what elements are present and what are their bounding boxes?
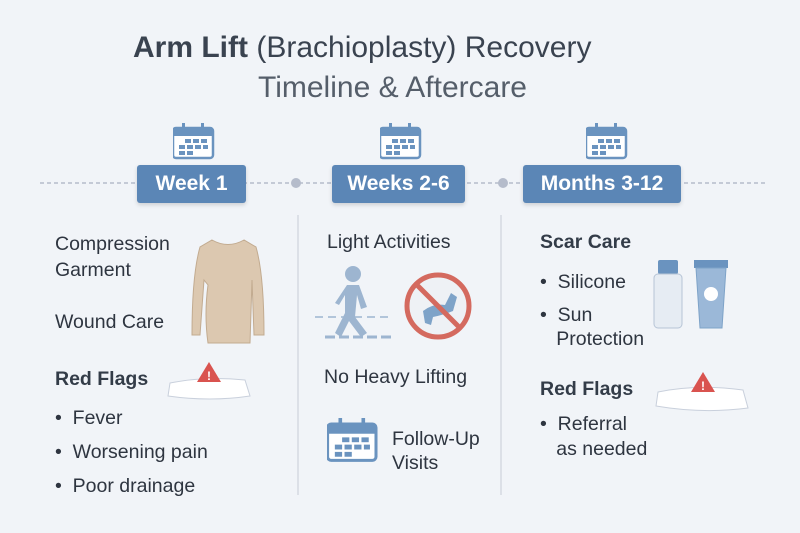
panel: months 3-12	[540, 231, 748, 460]
text: Timeline & Aftercare	[258, 71, 527, 104]
text: compression garment: Compression	[55, 233, 170, 255]
icon: silicone and sunscreen	[654, 260, 728, 328]
icon: gauze warning: !	[207, 369, 211, 383]
badge: weeks 2-6	[332, 165, 465, 203]
badge: months 3-12: Months 3-12	[541, 172, 663, 195]
list: sun protection: Protection	[556, 328, 644, 350]
panel: weeks 2-6	[315, 231, 480, 474]
heading: scar care: Scar Care	[540, 231, 631, 253]
list: scar care: • Silicone	[540, 271, 626, 293]
text: light activities: Light Activities	[327, 231, 451, 253]
list: red flags: • Poor drainage	[55, 475, 195, 497]
heading: red flags: Red Flags	[55, 368, 148, 390]
badge: weeks 2-6: Weeks 2-6	[347, 172, 450, 195]
text: follow-up visits: Follow-Up	[392, 428, 480, 450]
text: compression garment: Garment	[55, 259, 131, 281]
list: sun protection: • Sun	[540, 304, 592, 326]
text: wound care: Wound Care	[55, 311, 164, 333]
icon: walking	[315, 266, 391, 338]
text: follow-up visits	[392, 428, 480, 474]
icon: calendar months	[586, 123, 628, 160]
list: referral: as needed	[556, 438, 647, 460]
badge: week 1	[137, 165, 246, 203]
list: red flags: • Fever	[55, 407, 123, 429]
list: red flags	[55, 407, 208, 497]
icon: gauze warning: !	[701, 379, 705, 393]
title	[133, 31, 592, 104]
icon: gauze warning	[656, 372, 748, 412]
list: red flags: • Worsening pain	[55, 441, 208, 463]
text: Arm Lift (Brachioplasty) Recovery	[133, 31, 591, 64]
icon: calendar week1	[173, 123, 214, 160]
icon: calendar follow-up	[327, 418, 378, 462]
list: sun protection	[540, 304, 644, 350]
heading: red flags: Red Flags	[540, 378, 633, 400]
badge: months 3-12	[523, 165, 681, 203]
icon: garment	[192, 240, 264, 344]
badge: week 1: Week 1	[156, 172, 228, 195]
text: follow-up visits: Visits	[392, 452, 438, 474]
list: referral	[540, 413, 647, 460]
panel: week 1	[55, 233, 264, 497]
icon: calendar weeks2-6	[380, 123, 422, 160]
text: compression garment	[55, 233, 170, 281]
text: no heavy lifting: No Heavy Lifting	[324, 366, 467, 388]
icon: no lifting	[404, 272, 472, 340]
list: referral: • Referral	[540, 413, 627, 435]
icon: gauze warning	[168, 362, 250, 400]
